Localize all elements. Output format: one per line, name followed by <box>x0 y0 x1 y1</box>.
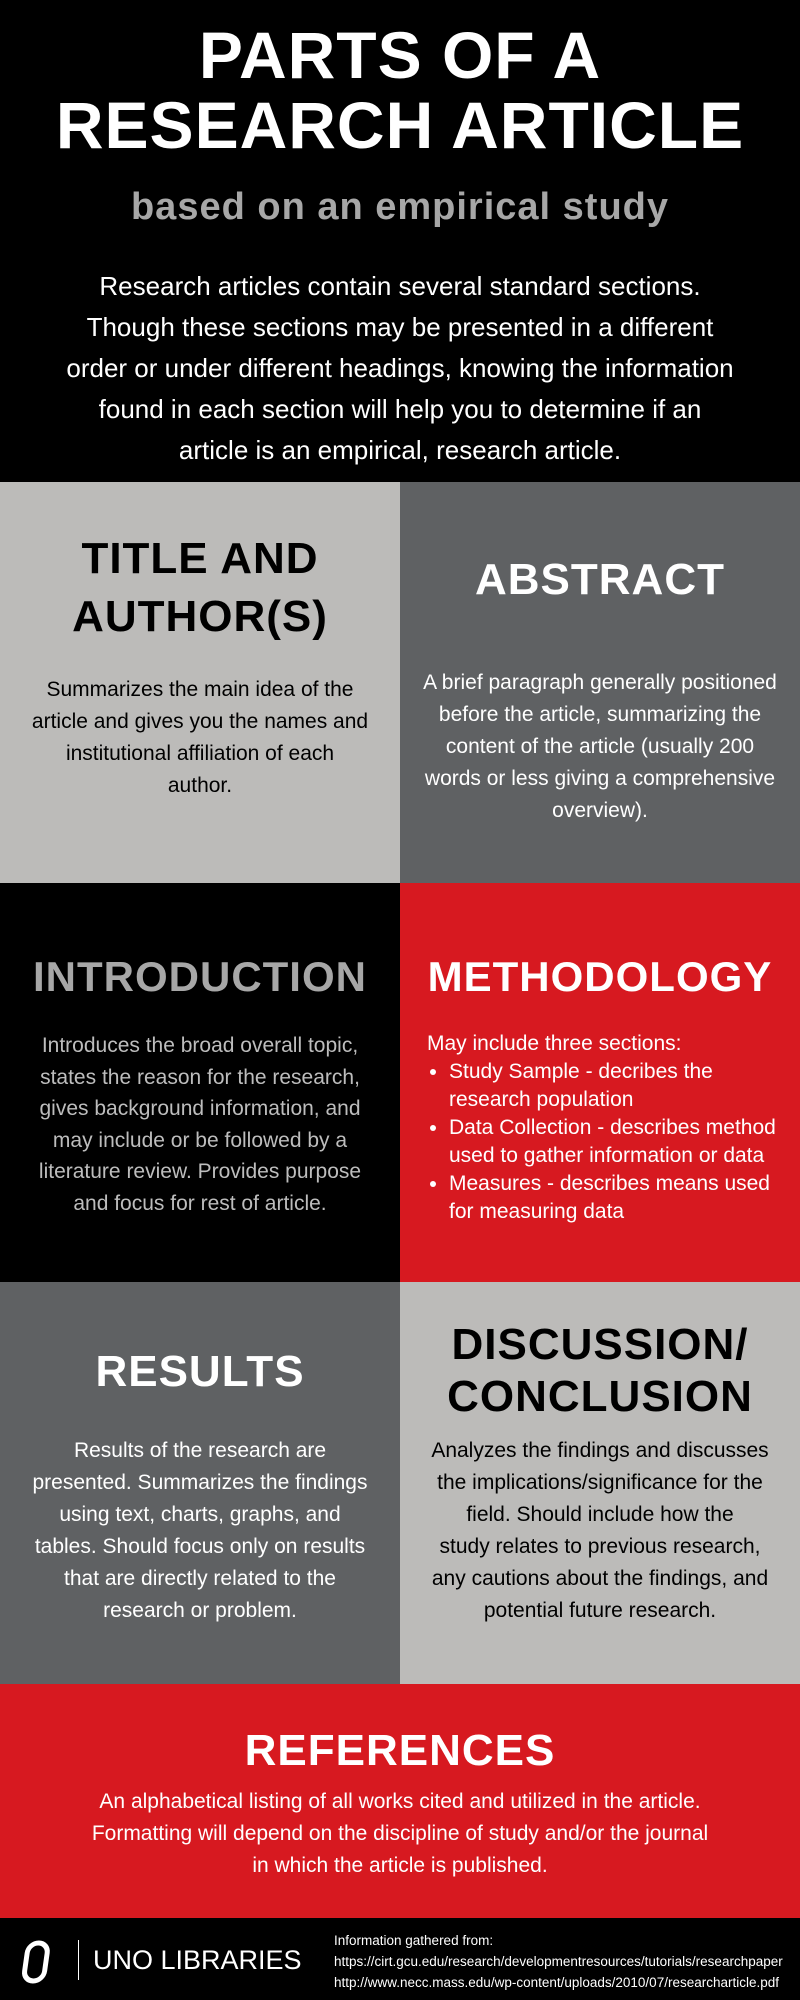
text: results: that are directly related to the <box>64 1567 336 1590</box>
text: title and authors <box>32 678 368 797</box>
text: abstract: A brief paragraph generally positioned <box>423 671 777 694</box>
text: results: presented. Summarizes the findings <box>32 1471 368 1494</box>
text: results: research or problem. <box>103 1599 297 1622</box>
divider and brand <box>78 1940 318 1980</box>
panel: references <box>0 1684 800 1918</box>
heading: references: REFERENCES <box>245 1726 555 1775</box>
panel: discussion <box>400 1282 800 1684</box>
text: methodology list: Measures - describes means used <box>449 1172 770 1195</box>
icon: UNO logo <box>22 1940 50 1984</box>
text: abstract: words or less giving a comprehensive <box>425 767 775 790</box>
heading: methodology: METHODOLOGY <box>428 953 772 1000</box>
panel: abstract <box>400 482 800 883</box>
text: abstract: content of the article (usually 200 <box>446 735 754 758</box>
text: discussion: Analyzes the findings and discusses <box>431 1439 769 1462</box>
heading: discussion: CONCLUSION <box>447 1372 753 1421</box>
subtitle: based on an empirical study <box>131 186 669 228</box>
heading: results: RESULTS <box>95 1347 305 1396</box>
heading: discussion: DISCUSSION/ <box>451 1320 749 1369</box>
intro text: article is an empirical, research article. <box>179 435 621 465</box>
text: methodology list <box>427 1032 776 1223</box>
text: introduction: gives background information, and <box>39 1097 361 1120</box>
text: abstract <box>423 671 777 822</box>
text: methodology list: used to gather information or data <box>449 1144 764 1167</box>
sources text <box>334 1933 783 1990</box>
text: methodology list: research population <box>449 1088 633 1111</box>
panel: methodology <box>400 883 800 1282</box>
text: discussion: any cautions about the findings, and <box>432 1567 768 1590</box>
sources text: https://cirt.gcu.edu/research/developmentresources/tutorials/researchpaper <box>334 1954 783 1969</box>
text: abstract: overview). <box>552 799 648 822</box>
header panel <box>0 0 800 482</box>
panel: introduction <box>0 883 400 1282</box>
text: title and authors: article and gives you the names and <box>32 710 368 733</box>
title: RESEARCH ARTICLE <box>56 88 744 162</box>
text: title and authors: Summarizes the main idea of the <box>46 678 353 701</box>
text: introduction <box>39 1034 361 1214</box>
intro text: Though these sections may be presented in a different <box>87 312 713 342</box>
divider and brand: UNO LIBRARIES <box>93 1945 302 1975</box>
text: results: using text, charts, graphs, and <box>59 1503 341 1526</box>
heading: introduction: INTRODUCTION <box>33 953 367 1000</box>
text: methodology list: for measuring data <box>449 1200 624 1223</box>
intro text: order or under different headings, knowing the information <box>66 353 734 383</box>
title: PARTS OF A <box>199 18 601 92</box>
text: introduction: and focus for rest of article. <box>73 1192 327 1214</box>
text: abstract: before the article, summarizing the <box>439 703 761 726</box>
heading: abstract: ABSTRACT <box>475 555 725 604</box>
text: references: Formatting will depend on the discipline of study and/or the journal <box>92 1822 708 1845</box>
text: methodology list: Data Collection - describes method <box>449 1116 776 1139</box>
text: introduction: Introduces the broad overall topic, <box>42 1034 358 1057</box>
text: discussion: potential future research. <box>484 1599 716 1622</box>
text: discussion: study relates to previous research, <box>440 1535 760 1558</box>
title <box>56 18 744 162</box>
text: results <box>32 1439 368 1622</box>
text: title and authors: author. <box>168 774 232 797</box>
heading: title and authors <box>72 534 328 641</box>
text: references: An alphabetical listing of all works cited and utilized in the article. <box>99 1790 701 1813</box>
sources text: Information gathered from: <box>334 1933 493 1948</box>
footer <box>0 1918 800 2000</box>
text: discussion: the implications/significance for the <box>437 1471 763 1494</box>
text: references: in which the article is published. <box>252 1854 548 1877</box>
text: methodology list: May include three sections: <box>427 1032 681 1055</box>
text: results: Results of the research are <box>74 1439 326 1462</box>
text: introduction: literature review. Provides purpose <box>39 1160 361 1183</box>
intro text <box>66 271 734 465</box>
text: introduction: states the reason for the research, <box>40 1066 360 1088</box>
text: title and authors: institutional affiliation of each <box>66 742 334 765</box>
panel: results <box>0 1282 400 1684</box>
sources text: http://www.necc.mass.edu/wp-content/uploads/2010/07/researcharticle.pdf <box>334 1975 779 1990</box>
intro text: Research articles contain several standard sections. <box>99 271 701 301</box>
heading: title and authors: AUTHOR(S) <box>72 592 328 641</box>
heading: discussion <box>447 1320 753 1421</box>
text: methodology list: Study Sample - decribes the <box>449 1060 713 1083</box>
panel: title and authors <box>0 482 400 883</box>
text: results: tables. Should focus only on results <box>35 1535 365 1558</box>
heading: title and authors: TITLE AND <box>81 534 319 583</box>
text: discussion: field. Should include how the <box>466 1503 734 1526</box>
text: introduction: may include or be followed by a <box>53 1128 347 1152</box>
intro text: found in each section will help you to determine if an <box>99 394 701 424</box>
text: discussion <box>431 1439 769 1622</box>
text: references <box>92 1790 708 1877</box>
